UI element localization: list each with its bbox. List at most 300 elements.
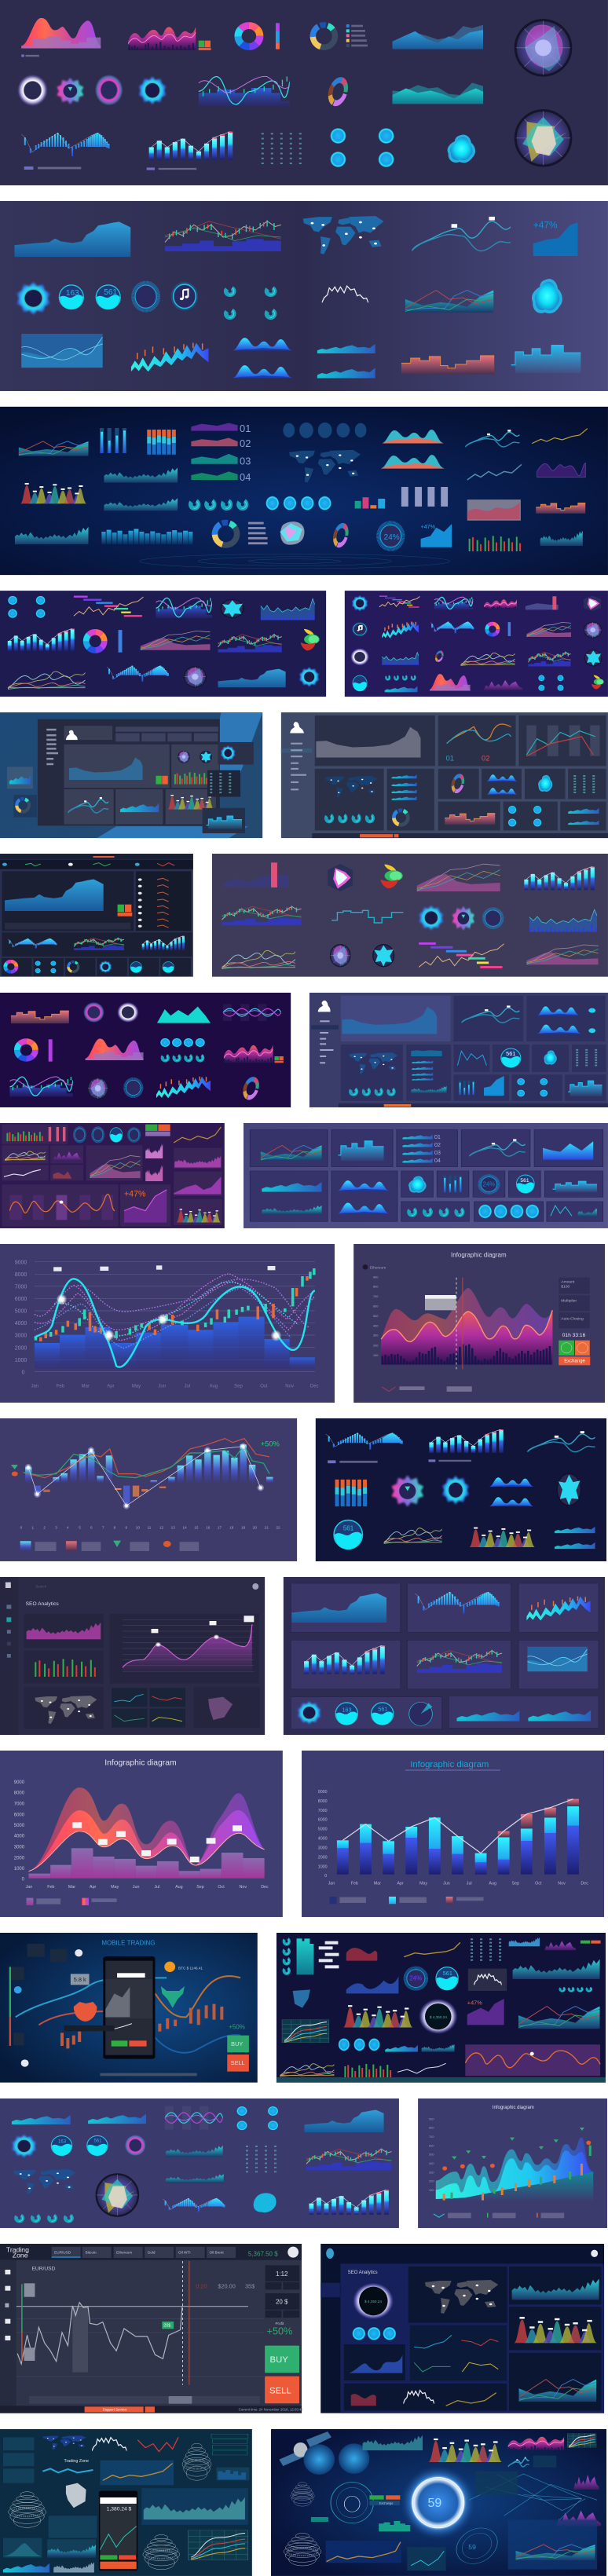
tab labels: EUR/USD xyxy=(54,2250,71,2254)
y axis: 4000 xyxy=(14,1835,25,1839)
asset label: Ethereum xyxy=(370,1265,386,1269)
ridges: 03 xyxy=(434,1149,441,1156)
gold line xyxy=(174,1127,221,1143)
curve chart xyxy=(156,598,212,618)
candle xyxy=(467,464,522,480)
higher lower tags xyxy=(24,2283,35,2361)
+47 chart: +47% xyxy=(124,1189,146,1198)
mini bars xyxy=(220,2470,244,2479)
stacked bars xyxy=(429,1429,504,1453)
x axis numbers: 3 xyxy=(55,1526,57,1530)
peak line panel xyxy=(454,1045,489,1072)
y axis: 0 xyxy=(22,1878,25,1883)
months: Oct xyxy=(535,1881,542,1886)
neon upper band xyxy=(436,2138,593,2199)
month labels: Feb xyxy=(57,1385,65,1389)
columns xyxy=(149,430,174,455)
wave chart xyxy=(9,1194,115,1220)
radar xyxy=(97,2174,138,2216)
main column xyxy=(340,2263,604,2413)
donut: multicolour xyxy=(238,26,260,46)
profile card xyxy=(64,726,112,740)
months: May xyxy=(111,1885,119,1890)
radar pink cyan xyxy=(515,20,571,75)
lower right lines xyxy=(508,2519,597,2570)
peak panel xyxy=(526,996,606,1041)
3D shape xyxy=(301,629,320,650)
ridge areas xyxy=(317,344,375,379)
input labels xyxy=(561,1279,584,1321)
bottom cards xyxy=(2,958,191,976)
footer: Current time: 24 November 2018, 12:03:43 xyxy=(239,2407,303,2411)
pink ridge xyxy=(174,1176,221,1195)
discs xyxy=(160,1038,205,1047)
keyboard xyxy=(211,2434,248,2455)
y axis: 200 xyxy=(429,2179,434,2183)
y axis: 2000 xyxy=(318,1855,328,1860)
multi lines xyxy=(222,950,295,969)
stacked xyxy=(304,1645,385,1674)
calendar xyxy=(246,2146,283,2172)
key xyxy=(508,622,511,636)
months: Jan xyxy=(26,1885,32,1890)
turbine xyxy=(182,2443,211,2480)
region panel xyxy=(194,1687,260,1728)
months: Jul xyxy=(154,1885,159,1890)
small noise xyxy=(577,1208,597,1217)
exchange button: Exchange xyxy=(564,1359,585,1364)
months: Nov xyxy=(558,1881,566,1886)
water 561: 561 xyxy=(443,1970,452,1977)
waves xyxy=(165,2106,223,2130)
20$ tag: 20$ xyxy=(163,2324,170,2329)
area xyxy=(304,2109,384,2132)
input cards xyxy=(559,1278,590,1328)
water 561 xyxy=(436,1967,458,1990)
rings xyxy=(74,1128,140,1142)
pink bars xyxy=(524,866,595,890)
teal area panel xyxy=(509,2267,602,2304)
bars xyxy=(2,1125,68,1144)
panel: purple-blue kit xyxy=(0,2098,399,2228)
ridges panel xyxy=(560,802,606,830)
bottom area panel xyxy=(115,789,163,825)
3D ring xyxy=(329,519,353,551)
star map xyxy=(66,2483,86,2508)
3D ring panel xyxy=(438,769,479,799)
logo: Zone xyxy=(13,2252,28,2259)
calendar xyxy=(262,134,302,163)
mountains xyxy=(430,674,471,691)
y axis: 500 xyxy=(429,2153,434,2157)
fade under wave xyxy=(436,2172,593,2201)
upper bar segments xyxy=(337,1806,579,1862)
ridges xyxy=(402,1133,441,1164)
month labels: Nov xyxy=(285,1385,294,1389)
months xyxy=(328,1881,588,1886)
main chart xyxy=(2,871,134,931)
red step xyxy=(401,356,494,375)
lines panel: 01 xyxy=(446,755,454,763)
y axis xyxy=(429,2117,434,2192)
panel: row 5 left product mockup xyxy=(0,712,262,838)
ridges xyxy=(555,1527,595,1549)
fine bars xyxy=(163,2198,224,2212)
face logo xyxy=(326,2249,334,2259)
price line xyxy=(17,2303,182,2364)
stacked bars xyxy=(149,132,233,160)
heading: SEO Analytics xyxy=(26,1601,59,1607)
red step panel xyxy=(438,802,500,830)
bottom lines panel xyxy=(64,789,114,825)
tiles xyxy=(291,1583,599,1729)
bottom row xyxy=(344,2384,507,2410)
panel: row 6 right kit xyxy=(212,854,608,977)
month labels: Aug xyxy=(210,1385,218,1389)
BTC coin: BTC $ 1146.41 xyxy=(178,1967,203,1970)
info cards xyxy=(9,1944,67,2045)
x axis numbers: 11 xyxy=(148,1526,152,1530)
tiles xyxy=(250,1129,603,1221)
pink noise xyxy=(174,1156,221,1168)
big chart panel xyxy=(110,1614,259,1683)
donut xyxy=(17,1041,35,1059)
curves xyxy=(9,1077,73,1097)
purple xyxy=(484,680,522,690)
tab labels: Oil WTI xyxy=(178,2250,191,2254)
discs xyxy=(339,2038,379,2051)
5.8k tag xyxy=(71,1974,90,1985)
ring xyxy=(352,595,368,611)
tab labels: Ethereum xyxy=(116,2250,132,2254)
range tabs xyxy=(100,2073,197,2076)
music ring xyxy=(171,282,198,311)
disc stats xyxy=(330,128,394,167)
legend xyxy=(248,522,268,544)
y axis labels: 1000 xyxy=(15,1358,27,1363)
water gauge 163: 163 xyxy=(66,289,79,298)
circular hud xyxy=(331,2483,373,2523)
radar xyxy=(373,945,394,967)
noise area xyxy=(15,527,89,544)
panel: row 7 right dashboard xyxy=(309,993,608,1107)
teal xyxy=(518,2007,600,2029)
star ring xyxy=(452,906,474,930)
donut xyxy=(211,518,241,550)
neon main band xyxy=(436,2150,593,2199)
blue step bars xyxy=(35,1317,315,1369)
bars xyxy=(470,536,520,551)
mini panels xyxy=(3,2437,249,2558)
gantt xyxy=(419,942,504,968)
top bar xyxy=(0,854,193,859)
discs xyxy=(266,496,331,510)
y axis: 700 xyxy=(429,2135,434,2139)
y axis xyxy=(318,1790,328,1879)
network lines xyxy=(469,2474,597,2521)
radar xyxy=(557,1473,581,1506)
numbered ridges: 03 xyxy=(240,455,251,467)
line xyxy=(29,1831,265,1872)
radar xyxy=(330,945,350,967)
chart: red purple mountains xyxy=(21,18,101,49)
panel: row 4 left xyxy=(0,591,326,697)
teal peaks xyxy=(157,1007,211,1023)
blob xyxy=(408,1176,427,1193)
hexagon xyxy=(584,596,601,611)
wave box xyxy=(527,1647,588,1671)
y axis labels: 0 xyxy=(22,1370,25,1375)
tri panel xyxy=(509,2307,602,2350)
months: Jan xyxy=(328,1881,335,1886)
months: Feb xyxy=(47,1885,54,1890)
ridges panel xyxy=(406,1045,451,1101)
pink ring xyxy=(83,1002,104,1023)
top bar xyxy=(0,2244,302,2260)
panel: Trading Zone platform xyxy=(0,2244,303,2413)
peaks xyxy=(233,338,293,379)
panel: dark navy kit xyxy=(316,1418,606,1561)
+47 chart xyxy=(467,1999,504,2025)
white ring xyxy=(350,648,369,665)
floating area xyxy=(203,808,245,833)
map panel xyxy=(341,1045,403,1101)
dark volume bars xyxy=(383,1345,550,1365)
water: 561 xyxy=(520,1178,529,1184)
pastel blob xyxy=(280,521,304,545)
phone xyxy=(103,1956,155,2059)
sidebar xyxy=(320,1020,333,1063)
active nav xyxy=(320,2283,340,2297)
ridges xyxy=(262,1182,322,1215)
ring: $ 4,350.24 xyxy=(364,2300,382,2303)
BTC coin xyxy=(164,1962,203,1972)
small line xyxy=(411,2551,444,2566)
sidebar icons xyxy=(6,1605,11,1658)
footer xyxy=(0,2406,303,2413)
y axis: 5000 xyxy=(14,1824,25,1828)
teal xyxy=(261,1145,322,1161)
tri xyxy=(177,1209,221,1223)
input labels: Multiplier xyxy=(561,1299,577,1304)
spike ring: 24% xyxy=(483,1181,496,1188)
bars down xyxy=(34,1486,166,1502)
water gauge 561: 561 xyxy=(104,288,117,297)
water xyxy=(334,1520,362,1549)
+50% label: +50% xyxy=(261,1440,280,1448)
purple wave xyxy=(537,463,585,477)
SELL xyxy=(265,2377,299,2403)
x axis numbers: 9 xyxy=(125,1526,127,1530)
legend xyxy=(328,1460,378,1463)
months: Jun xyxy=(133,1885,139,1890)
title: Infographic diagram xyxy=(451,1252,507,1259)
balance: 5,367.50 $ xyxy=(248,2251,278,2258)
y axis: 6000 xyxy=(318,1818,328,1823)
blue bars xyxy=(261,598,315,620)
24% ring: 24% xyxy=(409,1975,422,1982)
ridges xyxy=(104,467,178,510)
legend xyxy=(24,166,81,170)
peaks xyxy=(540,531,583,546)
teal lines panel xyxy=(509,2353,602,2410)
small bars xyxy=(355,497,385,508)
sidebar xyxy=(291,743,306,790)
y axis: 900 xyxy=(373,1275,379,1279)
ring xyxy=(419,905,444,931)
phone xyxy=(99,2491,137,2571)
floor grid xyxy=(140,554,450,569)
mauve xyxy=(526,622,571,637)
y axis: 400 xyxy=(429,2161,434,2165)
waves xyxy=(223,1004,281,1021)
panel: Infographic diagram neon wave xyxy=(418,2098,607,2228)
calendar panel xyxy=(572,1045,606,1072)
water gauge 163 xyxy=(59,285,83,309)
teal area xyxy=(141,2488,248,2525)
legend xyxy=(382,1386,472,1392)
magenta xyxy=(224,1045,273,1063)
small 59 ring xyxy=(449,2524,504,2567)
profit: +50% xyxy=(267,2326,292,2337)
peaks xyxy=(337,1180,390,1214)
current price line xyxy=(16,2306,248,2307)
y axis: 800 xyxy=(373,1284,379,1288)
x axis numbers: 10 xyxy=(136,1526,140,1530)
green line xyxy=(24,1445,269,1478)
phone: 1,380.24 $ xyxy=(107,2507,131,2512)
radar xyxy=(584,622,602,638)
big area xyxy=(291,1594,386,1623)
numbered ridges: 01 xyxy=(240,423,251,434)
spike ring xyxy=(484,909,502,928)
wave bars xyxy=(465,2044,600,2076)
y axis: 100 xyxy=(373,1353,379,1357)
footer xyxy=(339,1103,608,1107)
red marker xyxy=(462,1278,463,1369)
mid wave layer xyxy=(29,1810,265,1872)
ridges xyxy=(166,2146,224,2183)
grid chart xyxy=(282,2020,329,2043)
ridges xyxy=(456,1711,591,1722)
months: Dec xyxy=(261,1885,269,1890)
noise area xyxy=(513,1959,600,1979)
y axis: 3000 xyxy=(318,1846,328,1850)
grey area panel xyxy=(315,715,435,766)
months: Aug xyxy=(489,1881,496,1886)
pillars xyxy=(443,1176,462,1192)
months: Apr xyxy=(90,1885,97,1890)
y axis: 7000 xyxy=(318,1809,328,1813)
legend xyxy=(21,54,39,57)
x axis numbers: 6 xyxy=(90,1526,93,1530)
ring xyxy=(353,2283,394,2319)
lines panel xyxy=(438,715,515,766)
bars up xyxy=(25,1444,273,1483)
avatar xyxy=(591,2250,598,2257)
indicator chart xyxy=(224,862,289,887)
peaks xyxy=(381,455,445,469)
gauges xyxy=(189,499,247,510)
title: Infographic diagram xyxy=(493,2106,534,2110)
big area xyxy=(14,221,130,257)
ridge xyxy=(385,686,418,692)
y axis xyxy=(14,1780,25,1883)
wave panel xyxy=(508,2437,564,2450)
logo: Trading xyxy=(6,2245,29,2253)
numbered ridges: 02 xyxy=(240,437,251,449)
ridges: 01 xyxy=(434,1133,441,1140)
ring xyxy=(299,667,320,687)
y axis: 100 xyxy=(429,2188,434,2192)
data analysis panel xyxy=(24,1614,104,1648)
gauges xyxy=(386,675,416,680)
spike ring xyxy=(479,1176,498,1193)
tab labels: Oil Brent xyxy=(210,2250,224,2254)
comparison panel xyxy=(24,1651,104,1683)
triangles xyxy=(469,1528,535,1547)
red grey stripes xyxy=(467,499,521,521)
profit: Profit xyxy=(275,2322,284,2325)
discs panel xyxy=(512,1074,562,1101)
water 561 xyxy=(372,1703,394,1725)
stacked xyxy=(309,2190,389,2215)
white peak line xyxy=(322,286,368,302)
stacked bars xyxy=(8,628,75,651)
bottom tri panel xyxy=(166,789,216,825)
radar xyxy=(585,650,602,666)
lines xyxy=(384,1528,442,1543)
floating growth xyxy=(7,767,33,789)
ring xyxy=(11,2134,37,2158)
middle row xyxy=(2,932,192,957)
active tab xyxy=(311,1025,339,1030)
input labels: Auto-Closing xyxy=(561,1316,584,1321)
asset label xyxy=(363,1264,386,1270)
input labels: $100 xyxy=(561,1284,570,1289)
region map xyxy=(293,1989,310,2008)
closing info: $20.00 xyxy=(218,2282,236,2289)
lines xyxy=(527,1431,595,1452)
lower bar xyxy=(21,2333,23,2362)
big lines xyxy=(90,1155,141,1178)
step xyxy=(552,1181,597,1192)
month labels: Oct xyxy=(260,1385,268,1389)
world map xyxy=(303,216,384,254)
map panel xyxy=(315,769,384,830)
tab labels: Gold xyxy=(148,2250,156,2254)
BUY button xyxy=(227,2036,249,2052)
discs xyxy=(538,675,564,691)
ticker row xyxy=(0,860,193,869)
sidebar person icon xyxy=(290,722,304,734)
months: Nov xyxy=(240,1885,247,1890)
triangles chart xyxy=(20,483,87,503)
gauges xyxy=(559,1987,592,1992)
avatar xyxy=(252,1583,258,1590)
SELL button: SELL xyxy=(231,2059,245,2066)
step panel xyxy=(565,1074,606,1101)
grid xyxy=(16,2319,264,2377)
red wave xyxy=(346,1948,377,1961)
title: Infographic diagram xyxy=(410,1760,489,1769)
magenta xyxy=(484,599,517,609)
numbered ridges: 04 xyxy=(240,471,251,483)
colour key xyxy=(119,630,122,653)
small panels xyxy=(112,1688,185,1728)
red step xyxy=(536,503,585,514)
x axis numbers: 4 xyxy=(67,1526,69,1530)
